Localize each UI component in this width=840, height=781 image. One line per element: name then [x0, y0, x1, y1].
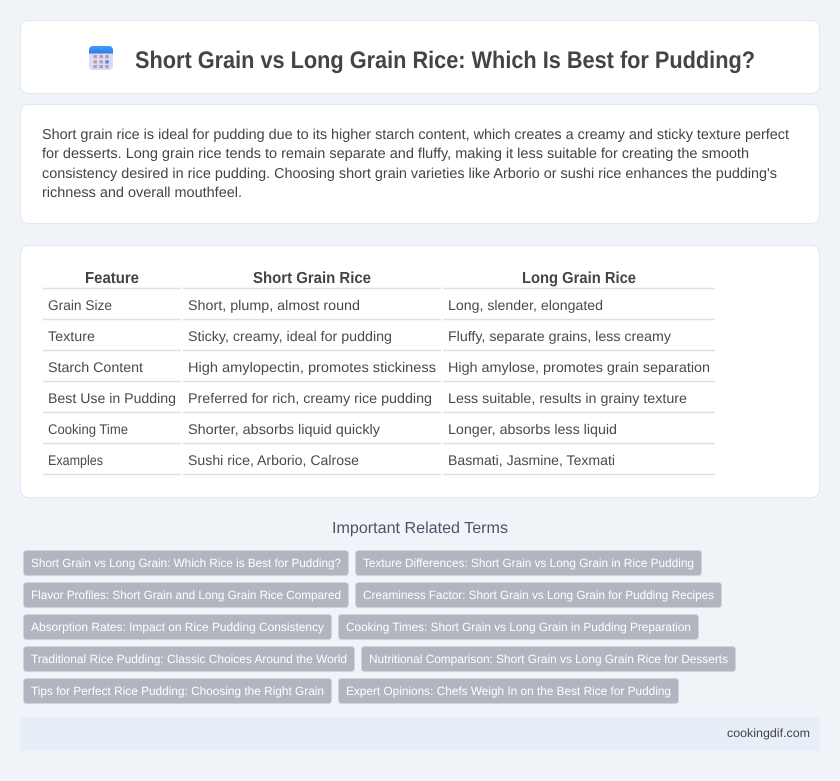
row: grain size [48, 297, 603, 313]
tag row 3: Cooking Times: Short Grain vs Long Grain in Pudding Preparation [346, 620, 691, 634]
row: texture [48, 328, 671, 344]
heading: related terms: Important Related Terms [332, 520, 508, 537]
text block: introduction: Short grain rice is ideal for pudding due to its higher starch content, which creates a creamy and sticky texture perfect [42, 127, 789, 143]
row: cooking time: Cooking Time [48, 421, 128, 437]
row: starch content: High amylopectin, promotes stickiness [188, 359, 436, 375]
row: grain size: Long, slender, elongated [448, 297, 603, 313]
tag row 1: Texture Differences: Short Grain vs Long Grain in Rice Pudding [363, 556, 694, 570]
row: examples: Examples [48, 452, 103, 468]
table header: Long Grain Rice [522, 270, 636, 287]
row: cooking time: Longer, absorbs less liquid [448, 421, 617, 437]
row: grain size: Short, plump, almost round [188, 297, 360, 313]
table header: Short Grain Rice [253, 270, 371, 287]
row: best use in pudding [48, 390, 687, 406]
text block: introduction: consistency desired in rice pudding. Choosing short grain varieties like Arborio or sushi rice enhances the pudding's [42, 166, 777, 182]
row: texture: Texture [48, 328, 95, 344]
footer [20, 717, 820, 751]
row: texture: Fluffy, separate grains, less creamy [448, 328, 671, 344]
row: starch content [48, 359, 710, 375]
tag row 5: Expert Opinions: Chefs Weigh In on the Best Rice for Pudding [346, 684, 671, 698]
tag row 5 [24, 678, 678, 704]
text block: introduction: richness and overall mouthfeel. [42, 185, 242, 201]
tag row 3: Absorption Rates: Impact on Rice Pudding Consistency [31, 620, 324, 634]
tag row 2: Creaminess Factor: Short Grain vs Long Grain for Pudding Recipes [363, 588, 714, 602]
tag row 2 [24, 582, 722, 608]
tag row 2: Flavor Profiles: Short Grain and Long Grain Rice Compared [31, 588, 341, 602]
row: starch content: Starch Content [48, 359, 143, 375]
table header: Feature [85, 270, 139, 287]
row: texture: Sticky, creamy, ideal for pudding [188, 328, 392, 344]
panel: header [20, 20, 820, 94]
tag row 1 [24, 550, 702, 576]
row: starch content: High amylose, promotes grain separation [448, 359, 710, 375]
tag row 3 [24, 614, 698, 640]
text block: introduction: for desserts. Long grain rice tends to remain separate and fluffy, making it less suitable for creating the smooth [42, 146, 749, 162]
row: examples [48, 452, 615, 468]
table header [85, 270, 636, 287]
icon: calendar [89, 46, 113, 70]
tag list: related terms [24, 550, 736, 704]
tag row 4: Traditional Rice Pudding: Classic Choices Around the World [31, 652, 347, 666]
row: examples: Sushi rice, Arborio, Calrose [188, 452, 359, 468]
row: best use in pudding: Preferred for rich, creamy rice pudding [188, 390, 432, 406]
row: cooking time [48, 421, 617, 437]
tag row 4 [24, 646, 736, 672]
text block: introduction [42, 127, 789, 201]
panel: comparison table [20, 246, 820, 498]
row: best use in pudding: Less suitable, results in grainy texture [448, 390, 687, 406]
row: best use in pudding: Best Use in Pudding [48, 390, 176, 406]
tag row 1: Short Grain vs Long Grain: Which Rice is Best for Pudding? [31, 556, 341, 570]
row: cooking time: Shorter, absorbs liquid quickly [188, 421, 380, 437]
title: Short Grain vs Long Grain Rice: Which Is Best for Pudding? [135, 47, 755, 74]
row: examples: Basmati, Jasmine, Texmati [448, 452, 615, 468]
row: grain size: Grain Size [48, 297, 112, 313]
footer: source: cookingdif.com [727, 726, 810, 740]
panel: introduction [20, 104, 820, 224]
tag row 5: Tips for Perfect Rice Pudding: Choosing the Right Grain [31, 684, 324, 698]
tag row 4: Nutritional Comparison: Short Grain vs Long Grain Rice for Desserts [369, 652, 728, 666]
